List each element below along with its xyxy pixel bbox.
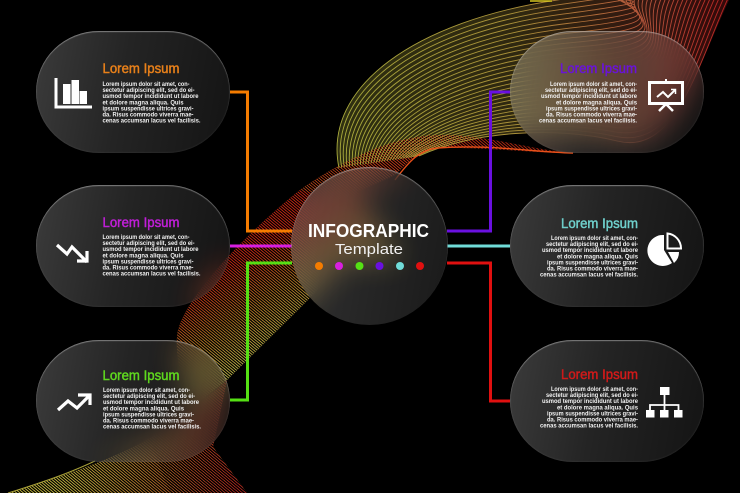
text block: ipsum suspendisse ultrices gravi-: [546, 106, 637, 112]
heading: Lorem Ipsum: [102, 60, 180, 76]
text block: cenas accumsan lacus vel facilisis.: [540, 424, 638, 430]
icon: up trend arrow: [58, 395, 90, 410]
text block: Lorem ipsum dolor sit amet, con-: [550, 82, 637, 88]
icon: bar chart: [56, 78, 92, 107]
text block: [540, 236, 639, 279]
panel: bottom right, hierarchy: [510, 340, 704, 462]
text block: ipsum suspendisse ultrices gravi-: [103, 412, 194, 418]
text block: sectetur adipiscing elit, sed do ei-: [546, 393, 638, 399]
text block: da. Risus commodo viverra mae-: [103, 418, 194, 424]
text block: ipsum suspendisse ultrices gravi-: [102, 106, 194, 112]
text block: et dolore magna aliqua. Quis: [102, 100, 184, 106]
text block: [102, 82, 201, 125]
text block: [540, 387, 639, 430]
heading: Lorem Ipsum: [102, 367, 180, 383]
text block: sectetur adipiscing elit, sed do ei-: [103, 394, 195, 400]
text block: cenas accumsan lacus vel facilisis.: [539, 119, 637, 125]
text block: cenas accumsan lacus vel facilisis.: [103, 425, 201, 431]
text block: sectetur adipiscing elit, sed do ei-: [102, 241, 194, 247]
text block: cenas accumsan lacus vel facilisis.: [102, 119, 201, 125]
heading: Lorem Ipsum: [102, 214, 180, 230]
text block: et dolore magna aliqua. Quis: [103, 406, 185, 412]
text block: Lorem ipsum dolor sit amet, con-: [551, 236, 638, 242]
text block: et dolore magna aliqua. Quis: [557, 254, 639, 260]
icon: presentation board: [650, 79, 682, 111]
text block: Lorem ipsum dolor sit amet, con-: [551, 387, 638, 393]
text block: usmod tempor incididunt ut labore: [103, 400, 200, 406]
text block: Lorem ipsum dolor sit amet, con-: [102, 82, 190, 88]
text block: et dolore magna aliqua. Quis: [556, 100, 638, 106]
icon: pie chart: [647, 234, 681, 266]
text block: ipsum suspendisse ultrices gravi-: [547, 411, 638, 417]
text block: da. Risus commodo viverra mae-: [102, 112, 194, 118]
panel: bottom left, rising arrow: [36, 340, 230, 462]
text block: cenas accumsan lacus vel facilisis.: [102, 272, 201, 278]
text block: da. Risus commodo viverra mae-: [546, 112, 637, 118]
text block: da. Risus commodo viverra mae-: [547, 418, 638, 424]
subtitle: Template: [335, 241, 403, 258]
heading: Lorem Ipsum: [560, 60, 637, 76]
text block: sectetur adipiscing elit, sed do ei-: [102, 88, 194, 94]
text block: Lorem ipsum dolor sit amet, con-: [102, 235, 190, 241]
text block: et dolore magna aliqua. Quis: [557, 405, 639, 411]
text block: cenas accumsan lacus vel facilisis.: [540, 273, 638, 279]
text block: da. Risus commodo viverra mae-: [102, 266, 194, 272]
text block: ipsum suspendisse ultrices gravi-: [102, 259, 194, 265]
text block: Lorem ipsum dolor sit amet, con-: [103, 388, 190, 394]
panel: middle left, falling arrow: [36, 185, 230, 307]
lower ribbon body: [8, 135, 573, 493]
central hub circle: [291, 167, 448, 325]
text block: sectetur adipiscing elit, sed do ei-: [546, 242, 638, 248]
heading: Lorem Ipsum: [561, 215, 638, 231]
icon: down trend arrow: [57, 245, 87, 262]
text block: sectetur adipiscing elit, sed do ei-: [545, 88, 637, 94]
heading: Lorem Ipsum: [561, 366, 638, 382]
panel: top right, presentation board: [510, 31, 704, 153]
icon: hierarchy: [646, 387, 682, 418]
colour dots: [315, 262, 424, 270]
text block: usmod tempor incididunt ut labore: [541, 94, 638, 100]
text block: et dolore magna aliqua. Quis: [102, 253, 184, 259]
text block: [103, 388, 201, 431]
text block: usmod tempor incididunt ut labore: [542, 248, 639, 254]
text block: usmod tempor incididunt ut labore: [102, 94, 199, 100]
text block: [539, 82, 638, 125]
panel: top left, bar chart: [36, 31, 230, 153]
text block: usmod tempor incididunt ut labore: [542, 399, 639, 405]
text block: [102, 235, 201, 278]
text block: ipsum suspendisse ultrices gravi-: [547, 260, 638, 266]
text block: usmod tempor incididunt ut labore: [102, 247, 199, 253]
panel: middle right, pie chart: [510, 185, 704, 307]
title: INFOGRAPHIC: [308, 221, 429, 241]
text block: da. Risus commodo viverra mae-: [547, 266, 638, 272]
